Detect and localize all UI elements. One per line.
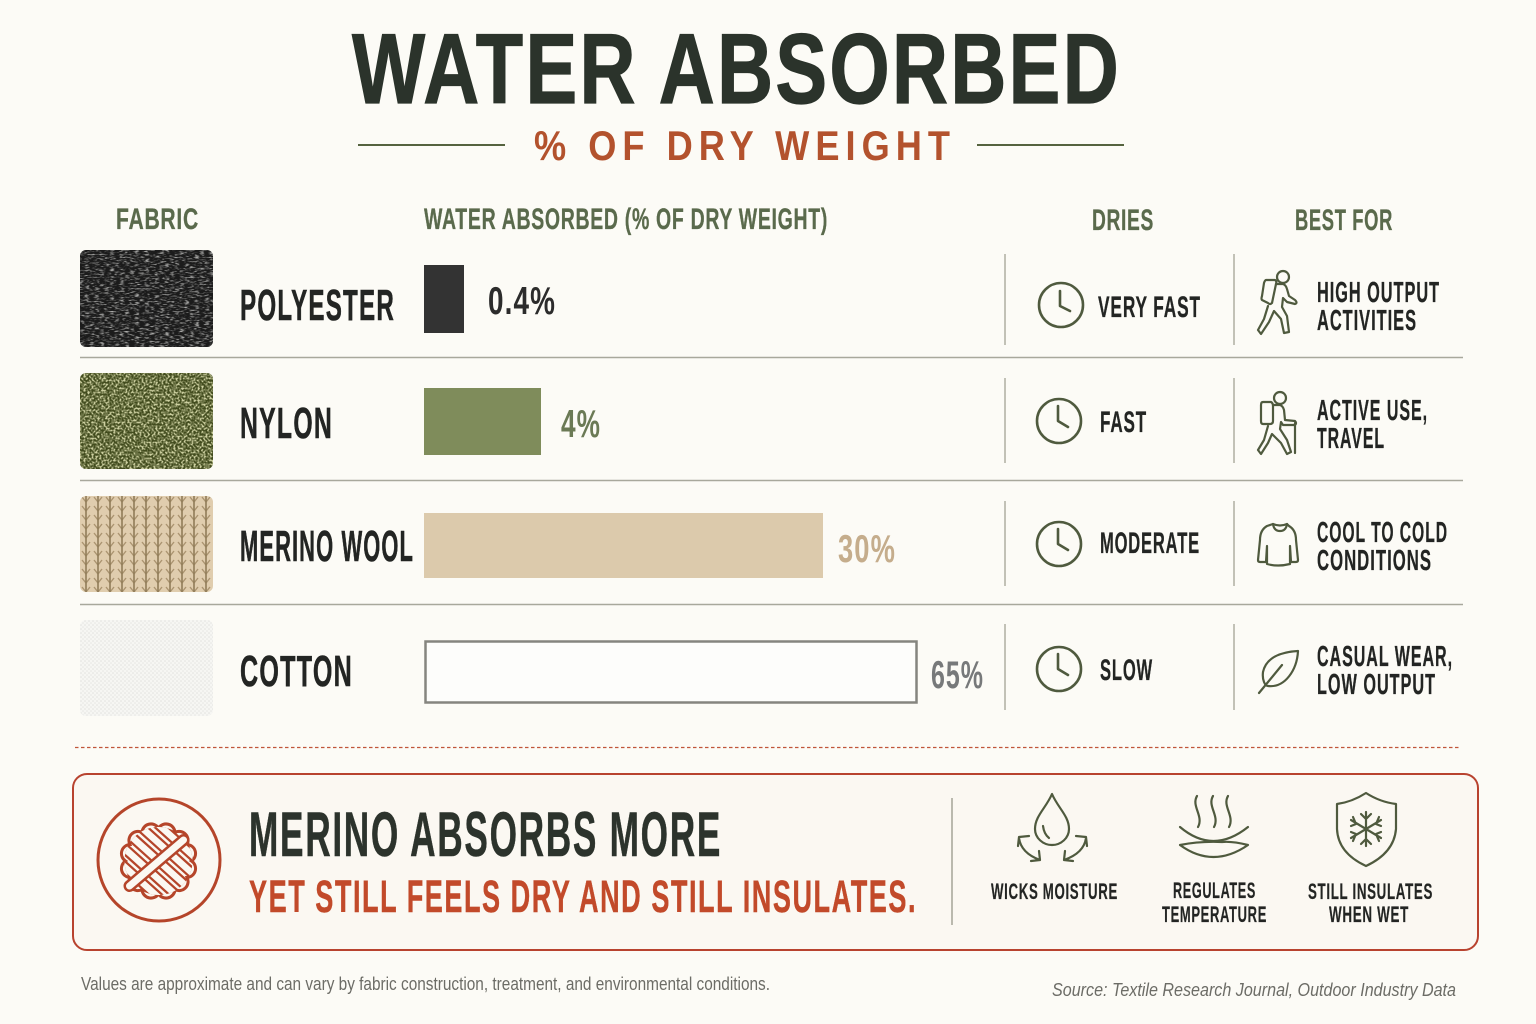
bar: merino wool (424, 513, 823, 578)
bar: cotton (426, 642, 916, 702)
icon: sweater (1258, 524, 1298, 566)
footnote: Values are approximate and can vary by fabric construction, treatment, and environmental conditions. (81, 974, 770, 994)
callout subhead: YET STILL FEELS DRY AND STILL INSULATES. (249, 871, 917, 922)
best for: high output (1258, 271, 1440, 337)
header: dries: DRIES (1092, 204, 1154, 237)
swatch: cotton (80, 620, 213, 716)
subtitle with rules: % OF DRY WEIGHT (534, 122, 956, 169)
benefit: wicks moisture (991, 794, 1118, 904)
bar: nylon (424, 388, 541, 455)
best for: active use (1258, 392, 1428, 455)
icon: clock (1039, 283, 1083, 327)
swatch: nylon (80, 373, 213, 469)
label: polyester: POLYESTER (240, 281, 395, 330)
column headers (116, 203, 1393, 237)
icon: hiker (1258, 271, 1296, 334)
value: merino wool: 30% (838, 528, 896, 571)
value: polyester: 0.4% (488, 280, 556, 323)
bar: polyester (424, 265, 464, 333)
swatch: merino wool (80, 496, 213, 592)
benefit: still insulates when wet (1308, 793, 1433, 927)
icon: clock (1037, 522, 1081, 566)
best for: high output: ACTIVITIES (1317, 305, 1417, 337)
value: nylon: 4% (561, 403, 601, 446)
drying: moderate: MODERATE (1100, 527, 1200, 560)
title: WATER ABSORBED (352, 13, 1121, 124)
drying: very fast: VERY FAST (1098, 291, 1201, 324)
row: merino wool: MERINO WOOL (240, 522, 414, 571)
header: water absorbed: WATER ABSORBED (% OF DRY WEIGHT) (424, 203, 828, 236)
header: fabric: FABRIC (116, 203, 199, 236)
icon: hiker with pole (1258, 392, 1296, 454)
value: cotton: 65% (931, 654, 984, 697)
benefit: regulates temperature: TEMPERATURE (1162, 902, 1267, 927)
best for: casual wear: LOW OUTPUT (1317, 669, 1436, 701)
best for: active use: ACTIVE USE, (1317, 395, 1428, 427)
benefit: regulates temperature: REGULATES (1173, 878, 1256, 903)
row: nylon (80, 373, 1428, 469)
best for: cool to cold: CONDITIONS (1317, 545, 1432, 577)
icon: yarn ball (98, 799, 220, 921)
icon: steam over fabric (1180, 796, 1248, 857)
source: Source: Textile Research Journal, Outdoor Industry Data (1052, 980, 1456, 1000)
row: cotton (80, 620, 1453, 716)
header: best for: BEST FOR (1295, 204, 1393, 237)
benefit: still insulates when wet: WHEN WET (1329, 902, 1409, 927)
drying: fast: FAST (1100, 406, 1147, 439)
benefit: wicks moisture: WICKS MOISTURE (991, 879, 1118, 904)
drying: very fast (1039, 283, 1201, 327)
icon: shield with snowflake (1337, 793, 1396, 866)
label: cotton: COTTON (240, 647, 353, 696)
benefit: still insulates when wet: STILL INSULATES (1308, 879, 1433, 904)
drying: slow (1037, 647, 1153, 691)
icon: clock (1037, 647, 1081, 691)
icon: drop with arrows (1018, 794, 1087, 861)
best for: high output: HIGH OUTPUT (1317, 277, 1440, 309)
icon: clock (1037, 399, 1081, 443)
best for: active use: TRAVEL (1317, 423, 1385, 455)
swatch: polyester (80, 250, 213, 347)
drying: moderate (1037, 522, 1200, 566)
label: nylon: NYLON (240, 399, 333, 448)
row: merino wool (80, 496, 1448, 592)
row: polyester (80, 250, 1440, 347)
drying: slow: SLOW (1100, 654, 1153, 687)
best for: cool to cold (1258, 517, 1448, 577)
drying: fast (1037, 399, 1147, 443)
benefit: regulates temperature (1162, 796, 1267, 927)
best for: casual wear (1259, 641, 1453, 701)
callout panel (73, 774, 1478, 950)
callout headline: MERINO ABSORBS MORE (249, 800, 722, 870)
icon: leaf (1259, 651, 1298, 693)
